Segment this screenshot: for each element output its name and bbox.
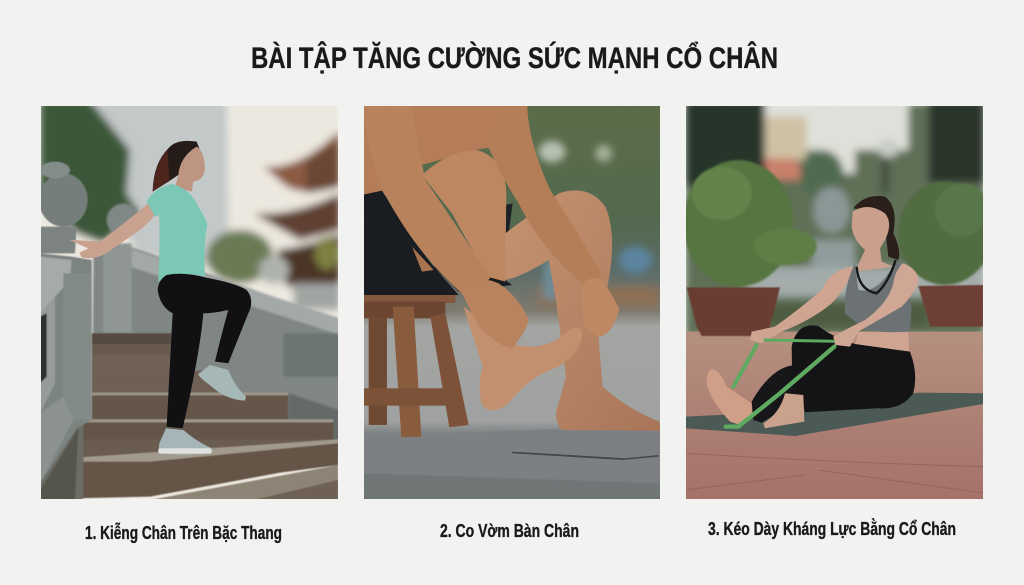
panel: photo of seated resistance band exercise	[683, 100, 992, 502]
raised shoe	[198, 365, 246, 401]
face and neck	[852, 207, 893, 272]
background: trees, buildings, planters, terrace	[685, 100, 985, 337]
right bush	[898, 182, 992, 285]
woman	[69, 141, 251, 455]
back railing	[92, 203, 340, 443]
left stone balustrade	[39, 162, 92, 500]
raised foot with toes	[464, 307, 583, 410]
face and neck	[175, 147, 205, 192]
stool	[364, 295, 469, 437]
stairs	[75, 333, 338, 500]
ponytail and hair	[853, 196, 899, 260]
near foot	[763, 393, 804, 428]
left planter	[687, 287, 780, 336]
far hand	[582, 278, 619, 337]
green resistance band	[726, 340, 834, 427]
far shin of black leggings	[752, 365, 799, 423]
standing shoe	[158, 428, 212, 455]
background: sky, building, trees, pagoda	[40, 100, 340, 500]
left bush	[683, 160, 817, 287]
near thigh and knee	[422, 150, 506, 282]
foreground arm	[833, 263, 918, 347]
far foot	[707, 369, 752, 425]
leggings	[158, 274, 251, 428]
caption 2: 2. Co Vờm Bàn Chân	[440, 521, 579, 541]
torso	[362, 103, 529, 197]
woman	[707, 196, 918, 428]
shirt	[147, 184, 207, 282]
caption 3: 3. Kéo Dày Kháng Lực Bằng Cổ Chân	[708, 518, 956, 539]
near arm	[386, 165, 490, 294]
yoga mat	[685, 393, 983, 436]
ponytail and hair	[153, 141, 199, 192]
panel: photo of calf raise on stairs	[39, 100, 340, 500]
title: BÀI TẬP TĂNG CƯỜNG SỨC MẠNH CỔ CHÂN	[251, 41, 778, 75]
black leggings: thigh and hip	[792, 325, 915, 412]
black shorts	[362, 191, 513, 298]
far arm	[486, 105, 603, 284]
right planter	[918, 285, 983, 327]
arm	[69, 203, 158, 258]
arm and shoulder	[750, 267, 853, 343]
panel: photo of arch contraction seated on stool	[362, 103, 662, 500]
background: blurred park and pavement	[362, 106, 662, 500]
far leg	[505, 190, 660, 431]
midriff	[855, 332, 909, 352]
near hand	[460, 280, 529, 348]
caption 1: 1. Kiễng Chân Trên Bặc Thang	[85, 522, 282, 543]
sports bra	[845, 260, 912, 332]
